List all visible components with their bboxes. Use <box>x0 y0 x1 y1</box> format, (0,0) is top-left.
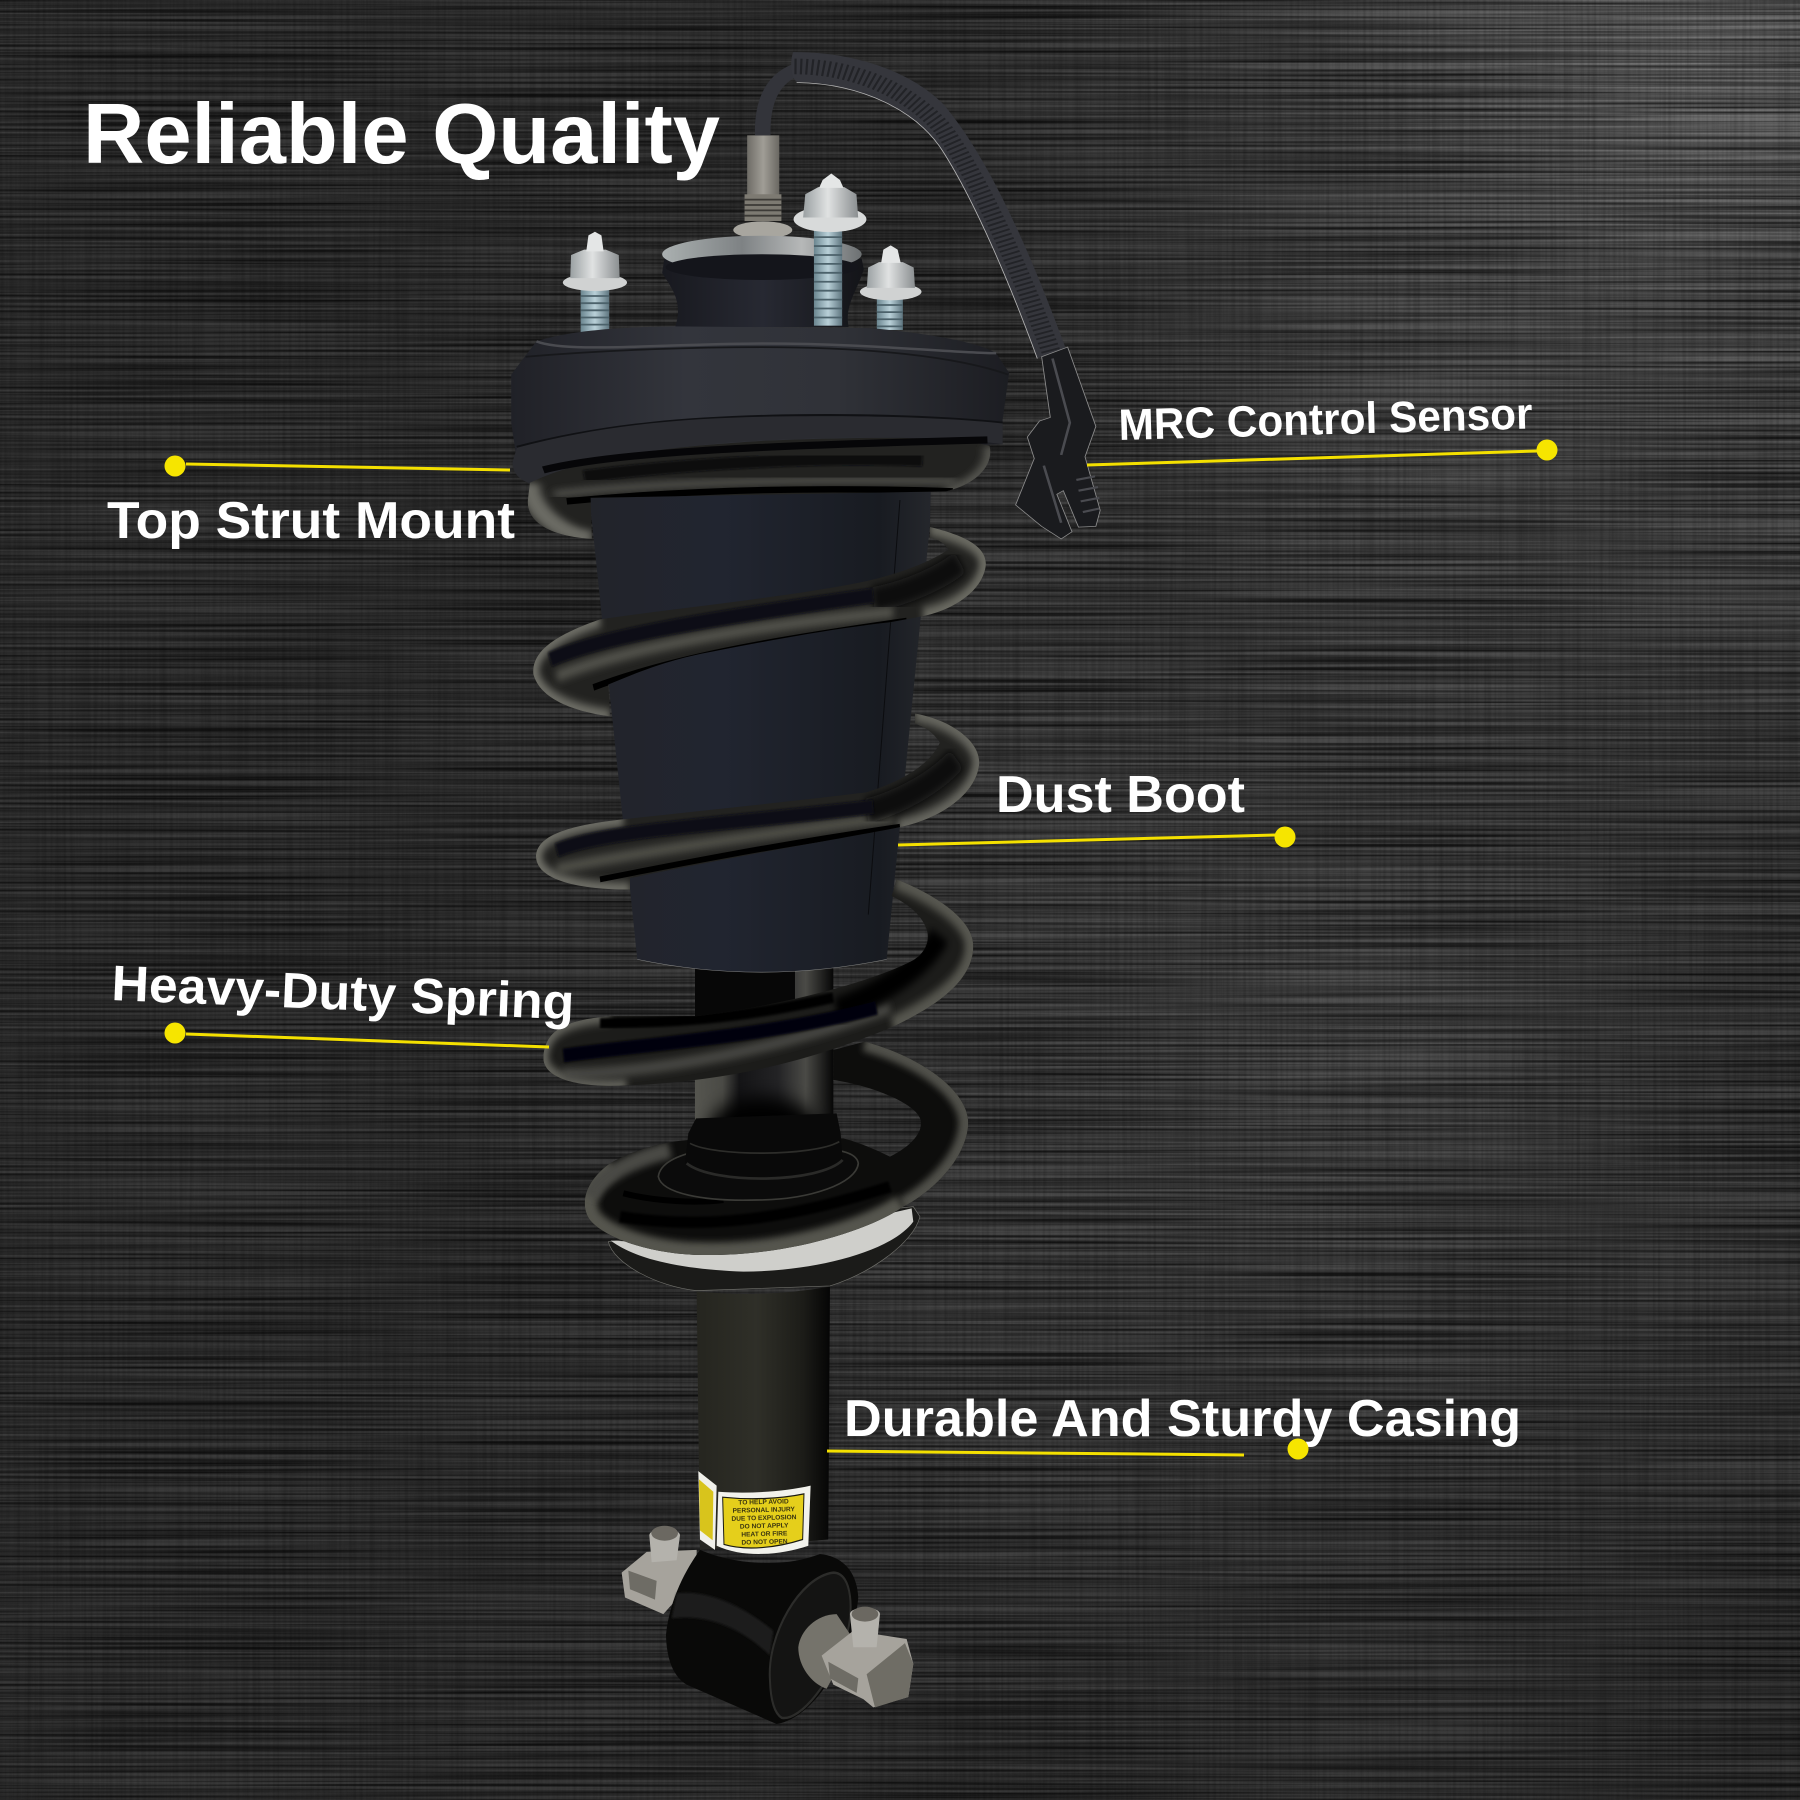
warning label text <box>731 1498 797 1547</box>
marker dot: Durable And Sturdy Casing <box>1288 1438 1308 1460</box>
leader line: Heavy-Duty Spring <box>186 1034 549 1047</box>
shock casing <box>697 1287 830 1550</box>
warning label text: DO NOT OPEN <box>741 1538 788 1547</box>
bolt centre <box>794 174 866 326</box>
mount body <box>511 326 1009 460</box>
warning label text: TO HELP AVOID <box>738 1498 789 1507</box>
bolt right <box>860 245 922 330</box>
marker dot: MRC Control Sensor <box>1536 440 1558 460</box>
sensor connector <box>1016 347 1100 539</box>
top coil <box>528 438 990 539</box>
coil 2 <box>533 527 986 716</box>
coil 3 <box>536 714 979 890</box>
marker dot: Top Strut Mount <box>164 456 186 476</box>
label: Durable And Sturdy Casing: Durable And Sturdy Casing <box>844 1390 1521 1448</box>
leader line: Dust Boot <box>898 835 1277 845</box>
leader line: Top Strut Mount <box>186 464 510 470</box>
bushing stub <box>798 1614 853 1689</box>
top strut mount and hardware <box>511 52 1100 539</box>
leader line: MRC Control Sensor <box>1087 451 1538 465</box>
label: Dust Boot: Dust Boot <box>996 766 1245 824</box>
strut assembly product illustration <box>511 52 1100 1724</box>
spring coils <box>533 527 986 1086</box>
rubber neck <box>662 259 864 327</box>
label: Top Strut Mount <box>107 456 515 550</box>
lower spring assembly <box>585 1042 968 1291</box>
title: Reliable Quality <box>83 87 720 182</box>
bolt left <box>563 232 627 334</box>
dust boot <box>585 454 932 972</box>
shock casing and labels <box>697 1287 830 1554</box>
spring seat <box>608 1207 920 1291</box>
piston rod <box>695 956 833 1172</box>
control sensor wire <box>763 52 1065 359</box>
label: Heavy-Duty Spring: Heavy-Duty Spring <box>111 955 575 1030</box>
left bracket <box>622 1526 697 1614</box>
white seat ring <box>611 1208 913 1272</box>
warning label yellow left <box>699 1479 713 1540</box>
warning label yellow panel <box>723 1494 804 1548</box>
warning label panel <box>717 1486 811 1554</box>
label: Dust Boot <box>898 766 1296 848</box>
warning label text: HEAT OR FIRE <box>741 1530 788 1539</box>
lower bushing and brackets <box>622 1526 913 1724</box>
label: MRC Control Sensor: MRC Control Sensor <box>1118 389 1533 450</box>
warning label text: DO NOT APPLY <box>740 1522 789 1531</box>
coil 4 <box>543 879 973 1086</box>
bushing end face <box>770 1573 851 1718</box>
right bracket <box>822 1607 913 1707</box>
coil inner seat rings <box>658 1148 858 1200</box>
warning label small <box>698 1471 717 1550</box>
marker dot: Heavy-Duty Spring <box>164 1022 186 1044</box>
bushing body <box>666 1550 858 1724</box>
bushing highlight <box>672 1593 773 1656</box>
warning label text: DUE TO EXPLOSION <box>731 1514 797 1523</box>
steel plate <box>662 236 862 273</box>
label: Top Strut Mount: Top Strut Mount <box>107 492 515 550</box>
bottom coil <box>585 1042 968 1255</box>
lower mount ring <box>513 416 1003 484</box>
sensor stud <box>733 135 792 239</box>
rod collar <box>685 1113 843 1179</box>
leader line: Durable And Sturdy Casing <box>827 1451 1244 1455</box>
warning label text: PERSONAL INJURY <box>733 1506 796 1515</box>
marker dot: Dust Boot <box>1274 826 1296 848</box>
